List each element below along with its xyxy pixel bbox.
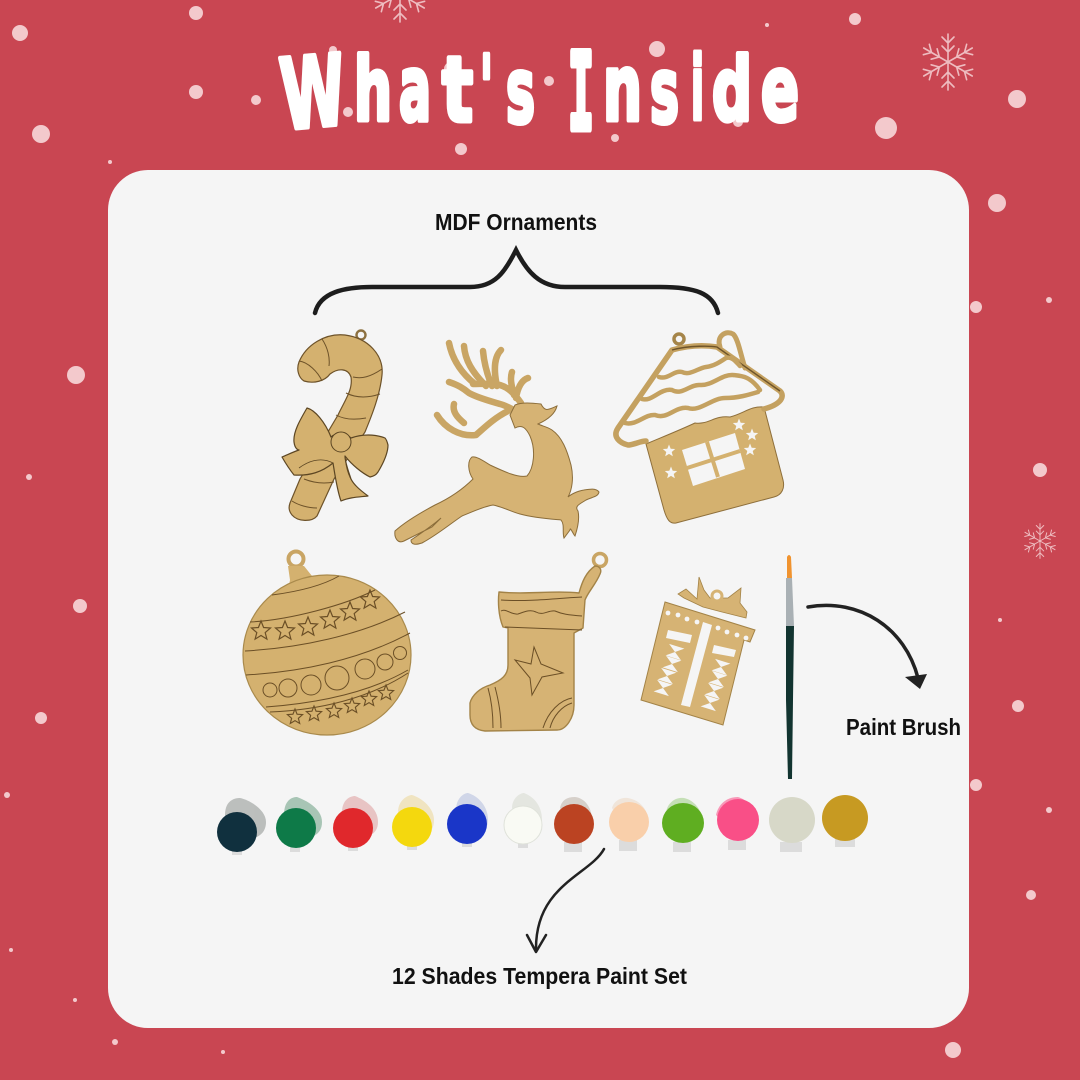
label: MDF Ornaments: MDF Ornaments <box>435 209 597 235</box>
pots <box>217 795 868 852</box>
ornament: gingerbread house <box>616 333 784 523</box>
arrow to paint set <box>527 849 604 952</box>
title: a <box>399 37 431 142</box>
title: W <box>276 34 350 152</box>
bracket <box>315 250 718 313</box>
title: h <box>354 39 392 141</box>
title: d <box>712 39 752 141</box>
label: 12 Shades Tempera Paint Set: 12 Shades Tempera Paint Set <box>392 963 687 989</box>
panel: white card <box>108 170 969 1028</box>
paint pot row <box>217 793 868 855</box>
title: i <box>691 37 704 140</box>
title: s <box>506 39 535 144</box>
ornament: bauble <box>243 552 411 735</box>
title: n <box>603 35 642 142</box>
ornament: gift box <box>641 577 755 725</box>
paint brush <box>786 555 794 779</box>
ornament: reindeer <box>395 343 599 544</box>
title: t <box>442 38 473 143</box>
ornament: stocking <box>470 554 606 731</box>
title: I <box>568 31 594 154</box>
snowflakes <box>373 0 1057 558</box>
label: Paint Brush: Paint Brush <box>846 714 961 740</box>
title <box>276 31 799 154</box>
title: s <box>650 39 679 144</box>
arrow to paint brush <box>808 605 927 689</box>
title: e <box>761 37 799 142</box>
title: ' <box>480 37 493 139</box>
ornament: candy cane <box>282 330 388 520</box>
